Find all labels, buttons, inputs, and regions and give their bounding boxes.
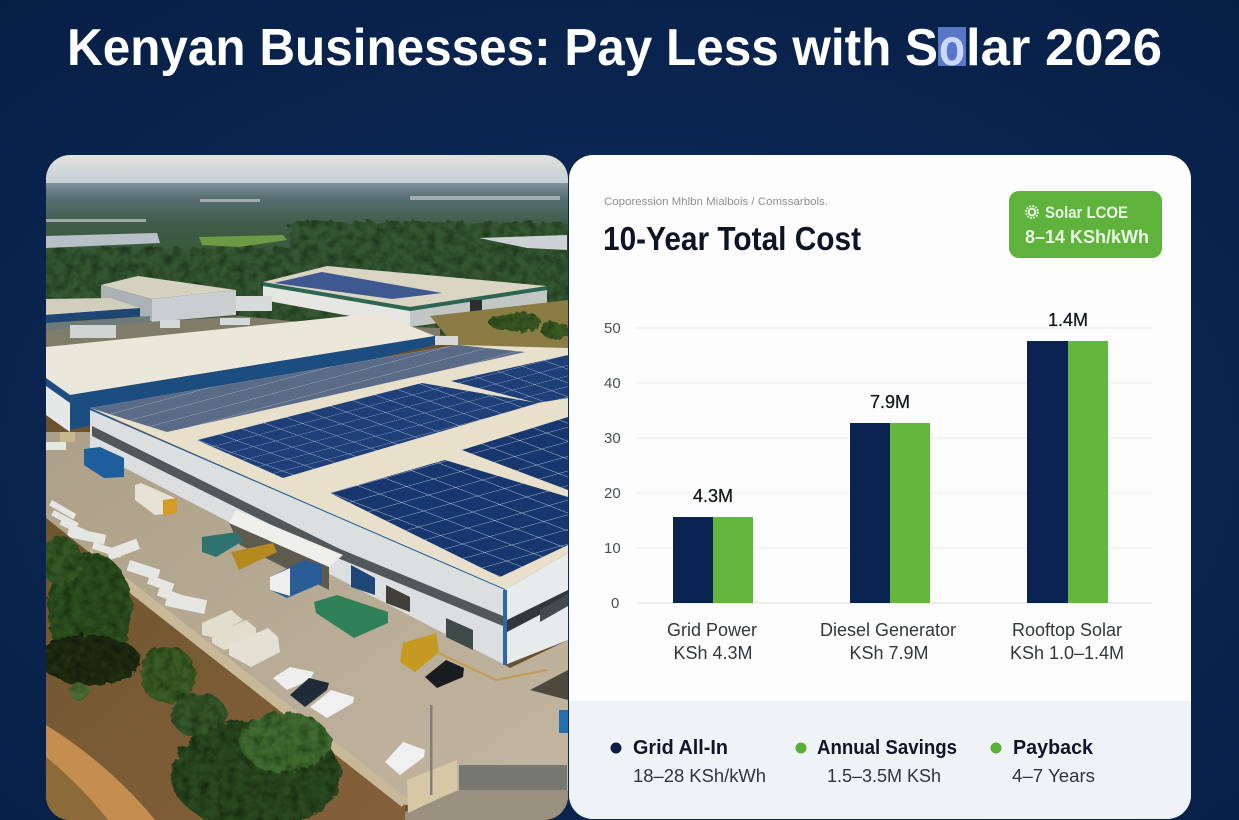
far-left warehouse and yard [46, 298, 568, 357]
title: Kenyan Businesses: Pay Less with S [67, 19, 938, 77]
panel: cost comparison card [569, 155, 1191, 820]
title: lar 2026 [966, 19, 1162, 77]
blue skips and loading area [46, 432, 124, 478]
stat: Grid All-In: Grid All-In [633, 737, 728, 759]
subtitle: Coporession Mhlbn Mialbois / Comssarbols. [604, 196, 828, 208]
green waste bins [314, 595, 388, 638]
bar: Grid Power [673, 486, 753, 603]
main building walls [90, 410, 568, 665]
white warehouse with blue fascia [46, 313, 458, 432]
bar: Diesel Generator: 7.9M [870, 392, 910, 412]
bar: Diesel Generator [850, 392, 930, 603]
callout: Solar LCOE badge [1009, 191, 1162, 258]
fence [87, 553, 405, 803]
icon: sun [1026, 206, 1038, 218]
x axis labels [667, 620, 1124, 663]
heading: 10-Year Total Cost [603, 220, 861, 257]
y axis labels: 50 [604, 320, 621, 337]
lamp post [430, 705, 432, 795]
gate [407, 760, 567, 813]
y axis labels: 20 [604, 485, 621, 502]
x axis labels: Grid Power [667, 620, 757, 640]
left grey warehouse [101, 276, 272, 322]
stat: Grid All-In: 18–28 KSh/kWh [633, 766, 766, 786]
stat: Payback: Payback [1013, 737, 1094, 759]
y axis labels: 0 [611, 595, 619, 612]
stat: Annual Savings: Annual Savings [817, 737, 957, 759]
stat: Annual Savings: 1.5–3.5M KSh [827, 766, 941, 786]
bar: Grid Power: 4.3M [693, 486, 733, 506]
soil and dirt road [46, 518, 405, 820]
callout: Solar LCOE badge: 8–14 KSh/kWh [1025, 227, 1149, 247]
title: o [939, 19, 965, 77]
bar: Rooftop Solar [1027, 310, 1108, 603]
x axis labels: KSh 4.3M [673, 643, 753, 663]
ground yard [46, 432, 568, 805]
main building roof [90, 345, 568, 590]
panel: aerial photo of solar warehouse [30, 155, 590, 820]
far building with green trim [263, 266, 547, 327]
callout: Solar LCOE badge: Solar LCOE [1045, 203, 1128, 222]
stat: Payback: 4–7 Years [1012, 766, 1095, 786]
trees [38, 536, 341, 820]
x axis labels: KSh 1.0–1.4M [1010, 643, 1124, 663]
x axis labels: Diesel Generator [820, 620, 956, 640]
bar chart [604, 310, 1152, 663]
y axis labels: 10 [604, 540, 621, 557]
x axis labels: KSh 7.9M [849, 643, 929, 663]
bar: Rooftop Solar: 1.4M [1048, 310, 1088, 330]
vehicles [49, 483, 464, 775]
footer band [569, 701, 1191, 820]
y axis labels: 40 [604, 375, 621, 392]
stat: Grid All-In [610, 737, 766, 786]
y axis labels [604, 320, 621, 612]
stat: Payback [990, 737, 1095, 786]
y axis labels: 30 [604, 430, 621, 447]
stat: Annual Savings [796, 737, 957, 786]
x axis labels: Rooftop Solar [1012, 620, 1122, 640]
